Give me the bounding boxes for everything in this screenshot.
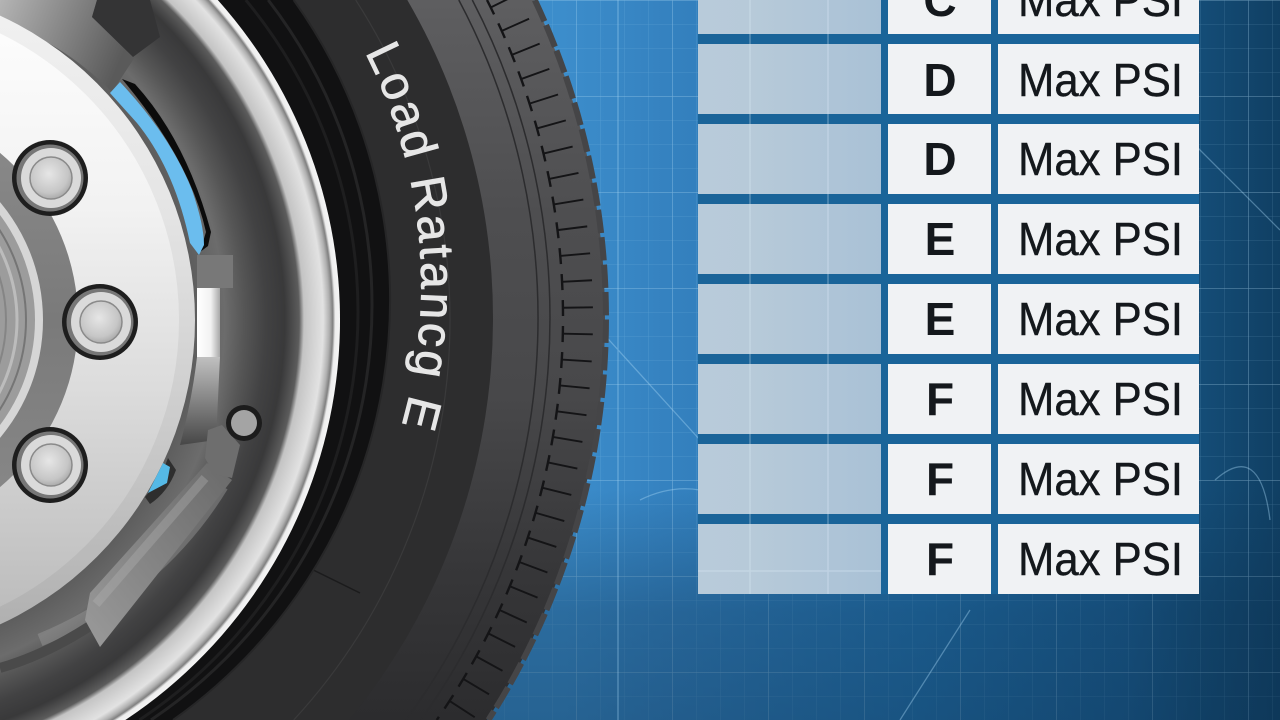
lug nut bottom — [12, 427, 88, 503]
row D: Max PSI — [1018, 54, 1183, 106]
lug nut middle — [62, 284, 138, 360]
disc edge band — [0, 0, 187, 647]
row F: F — [926, 453, 954, 505]
row D — [698, 44, 1199, 114]
row E — [698, 204, 1199, 274]
window shine — [197, 288, 220, 357]
upper gray wedge — [0, 0, 135, 92]
valve bump — [205, 425, 240, 478]
row E: Max PSI — [1018, 293, 1183, 345]
inner bead groove — [0, 0, 390, 720]
tire tread silhouette — [0, 0, 606, 720]
lower spoke highlight — [96, 478, 205, 604]
sidewall — [0, 0, 493, 720]
row D — [698, 124, 1199, 194]
sidewall lettering: Load Ratancg E — [366, 40, 452, 431]
row F — [698, 444, 1199, 514]
spoke bar above window — [197, 255, 233, 288]
row F — [698, 524, 1199, 594]
row F: Max PSI — [1018, 373, 1183, 425]
row D: D — [923, 133, 957, 185]
tire — [126, 0, 609, 720]
blueprint lines over glass cells — [698, 0, 881, 594]
row F: F — [926, 533, 954, 585]
row E: E — [925, 293, 955, 345]
upper spoke — [92, 0, 160, 57]
row E: E — [925, 213, 955, 265]
lower spoke — [85, 463, 232, 647]
row D: Max PSI — [1018, 133, 1183, 185]
row F — [698, 364, 1199, 434]
row D: D — [923, 54, 957, 106]
hub — [0, 137, 43, 503]
row E — [698, 284, 1199, 354]
small blue slot — [145, 458, 176, 504]
row F: Max PSI — [1018, 453, 1183, 505]
blue slot — [110, 79, 211, 255]
wheel rim — [0, 0, 340, 720]
spoke below window — [180, 357, 220, 445]
load range table — [698, 0, 1199, 594]
row C — [698, 0, 1199, 34]
tread blocks — [406, 0, 578, 720]
table backing — [698, 0, 1199, 594]
lower rim groove — [0, 626, 90, 668]
rim rings — [0, 0, 340, 720]
row F: Max PSI — [1018, 533, 1183, 585]
lug nut top — [12, 140, 88, 216]
lower rim highlight — [40, 486, 222, 640]
sidewall creases — [293, 0, 450, 720]
inner hub ring — [0, 102, 78, 538]
valve — [226, 405, 262, 441]
row E: Max PSI — [1018, 213, 1183, 265]
row F: F — [926, 373, 954, 425]
wheel disc — [0, 0, 195, 655]
